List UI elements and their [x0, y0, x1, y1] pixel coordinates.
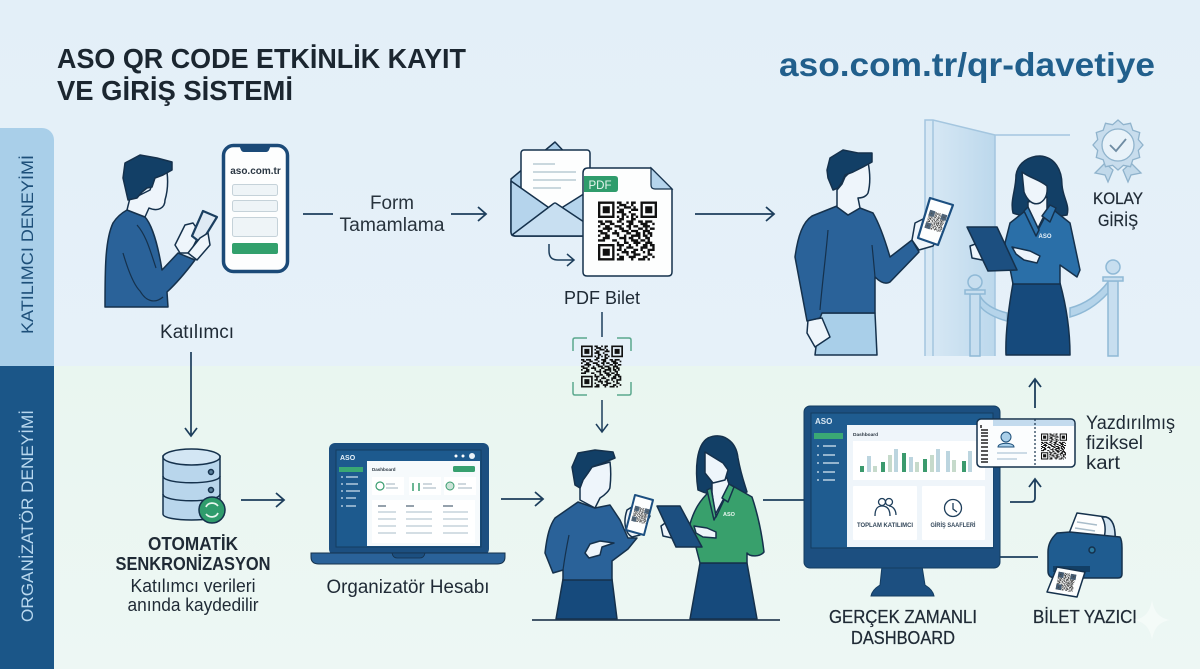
title [57, 43, 466, 106]
illustration: staff in green shirt [657, 436, 764, 619]
arrow: sync to laptop [241, 493, 284, 507]
label: realtime dashboard: DASHBOARD [851, 628, 955, 648]
arrow: participant to sync [185, 352, 197, 436]
label: printed physical card [1086, 413, 1175, 474]
panel: participant sidebar [0, 128, 54, 366]
illustration: entrance door [925, 120, 1070, 356]
label: ticket printer: BİLET YAZICI [1033, 607, 1137, 627]
panel: organizer sidebar: ORGANİZATÖR DENEYİMİ [18, 410, 37, 622]
icon: approval badge [1093, 120, 1143, 182]
participant figure with phone [105, 155, 217, 307]
arrow: laptop to staff [501, 492, 543, 506]
label: PDF Bilet: PDF Bilet [564, 288, 640, 308]
icon: ticket printer [1047, 513, 1122, 597]
title: ASO QR CODE ETKİNLİK KAYIT [57, 43, 466, 74]
panel: organizer background [0, 366, 1200, 669]
label: automatic sync: OTOMATİK [148, 534, 238, 554]
icon: dashboard monitor: ASO [815, 417, 832, 426]
panel: participant sidebar: KATILIMCI DENEYİMİ [18, 155, 37, 334]
arrow: qr scan to staff [596, 400, 608, 432]
arrow: card to entrance [1029, 379, 1041, 408]
panel: organizer sidebar [0, 366, 54, 669]
floor line [532, 619, 780, 621]
label: realtime dashboard [829, 607, 977, 648]
line: dashboard to printer [1000, 556, 1038, 558]
illustration: staff in green shirt: ASO [723, 512, 736, 518]
arrow: staff to dashboard [763, 499, 804, 501]
icon: organizer laptop: Dashboard [372, 467, 396, 472]
icon: envelope [511, 142, 590, 236]
icon: dashboard monitor: GİRİŞ SAAFLERİ [930, 521, 976, 529]
label: realtime dashboard: GERÇEK ZAMANLI [829, 607, 977, 627]
phone with form [224, 145, 288, 272]
illustration: attendee at check-in [545, 450, 653, 619]
icon: dashboard monitor: Dashboard [853, 432, 878, 438]
title: VE GİRİŞ SİSTEMİ [57, 75, 293, 106]
arrow: form start [303, 213, 333, 215]
label: automatic sync [116, 534, 270, 615]
label: automatic sync: anında kaydedilir [128, 595, 259, 615]
panel: participant background [0, 0, 1200, 366]
label: automatic sync: SENKRONİZASYON [116, 554, 270, 574]
sparkle mark [1134, 600, 1170, 640]
arrow: dashboard to card [1010, 479, 1041, 502]
label: form completion: Form [370, 193, 414, 214]
icon: dashboard monitor [804, 406, 1000, 596]
icon: dashboard monitor: TOPLAM KATILIMCI [857, 522, 913, 529]
arrow: pdf to qr scan [601, 312, 603, 337]
icon: organizer laptop: ASO [340, 455, 356, 462]
arrow: form to pdf [451, 207, 486, 221]
illustration: staff member with tablet: ASO [1038, 234, 1052, 240]
label: easy entry: GİRİŞ [1098, 211, 1138, 230]
label: Katılımcı: Katılımcı [160, 322, 234, 343]
illustration: attendee showing phone [795, 150, 953, 355]
arrow: envelope to pdf [549, 244, 574, 266]
illustration: rope stanchions [965, 260, 1123, 356]
icon: pdf ticket [583, 168, 672, 276]
icon: printed card [977, 419, 1075, 467]
label: printed physical card: Yazdırılmış [1086, 413, 1175, 434]
label: form completion: Tamamlama [340, 215, 445, 236]
label: easy entry [1093, 189, 1143, 230]
label: easy entry: KOLAY [1093, 189, 1143, 208]
website url: aso.com.tr/qr-davetiye [779, 46, 1155, 83]
icon: organizer laptop [311, 443, 505, 564]
arrow: pdf to entrance [695, 207, 774, 221]
illustration: staff member with tablet [967, 156, 1080, 355]
icon: qr scan frame [573, 338, 631, 395]
label: printed physical card: kart [1086, 453, 1121, 474]
label: printed physical card: fiziksel [1086, 433, 1143, 454]
icon: pdf ticket: PDF [588, 180, 612, 192]
label: form completion [340, 193, 445, 236]
icon: database with sync [163, 449, 225, 523]
phone with form: aso.com.tr [230, 166, 281, 177]
label: automatic sync: Katılımcı verileri [130, 576, 256, 596]
label: organizer account: Organizatör Hesabı [326, 577, 490, 598]
